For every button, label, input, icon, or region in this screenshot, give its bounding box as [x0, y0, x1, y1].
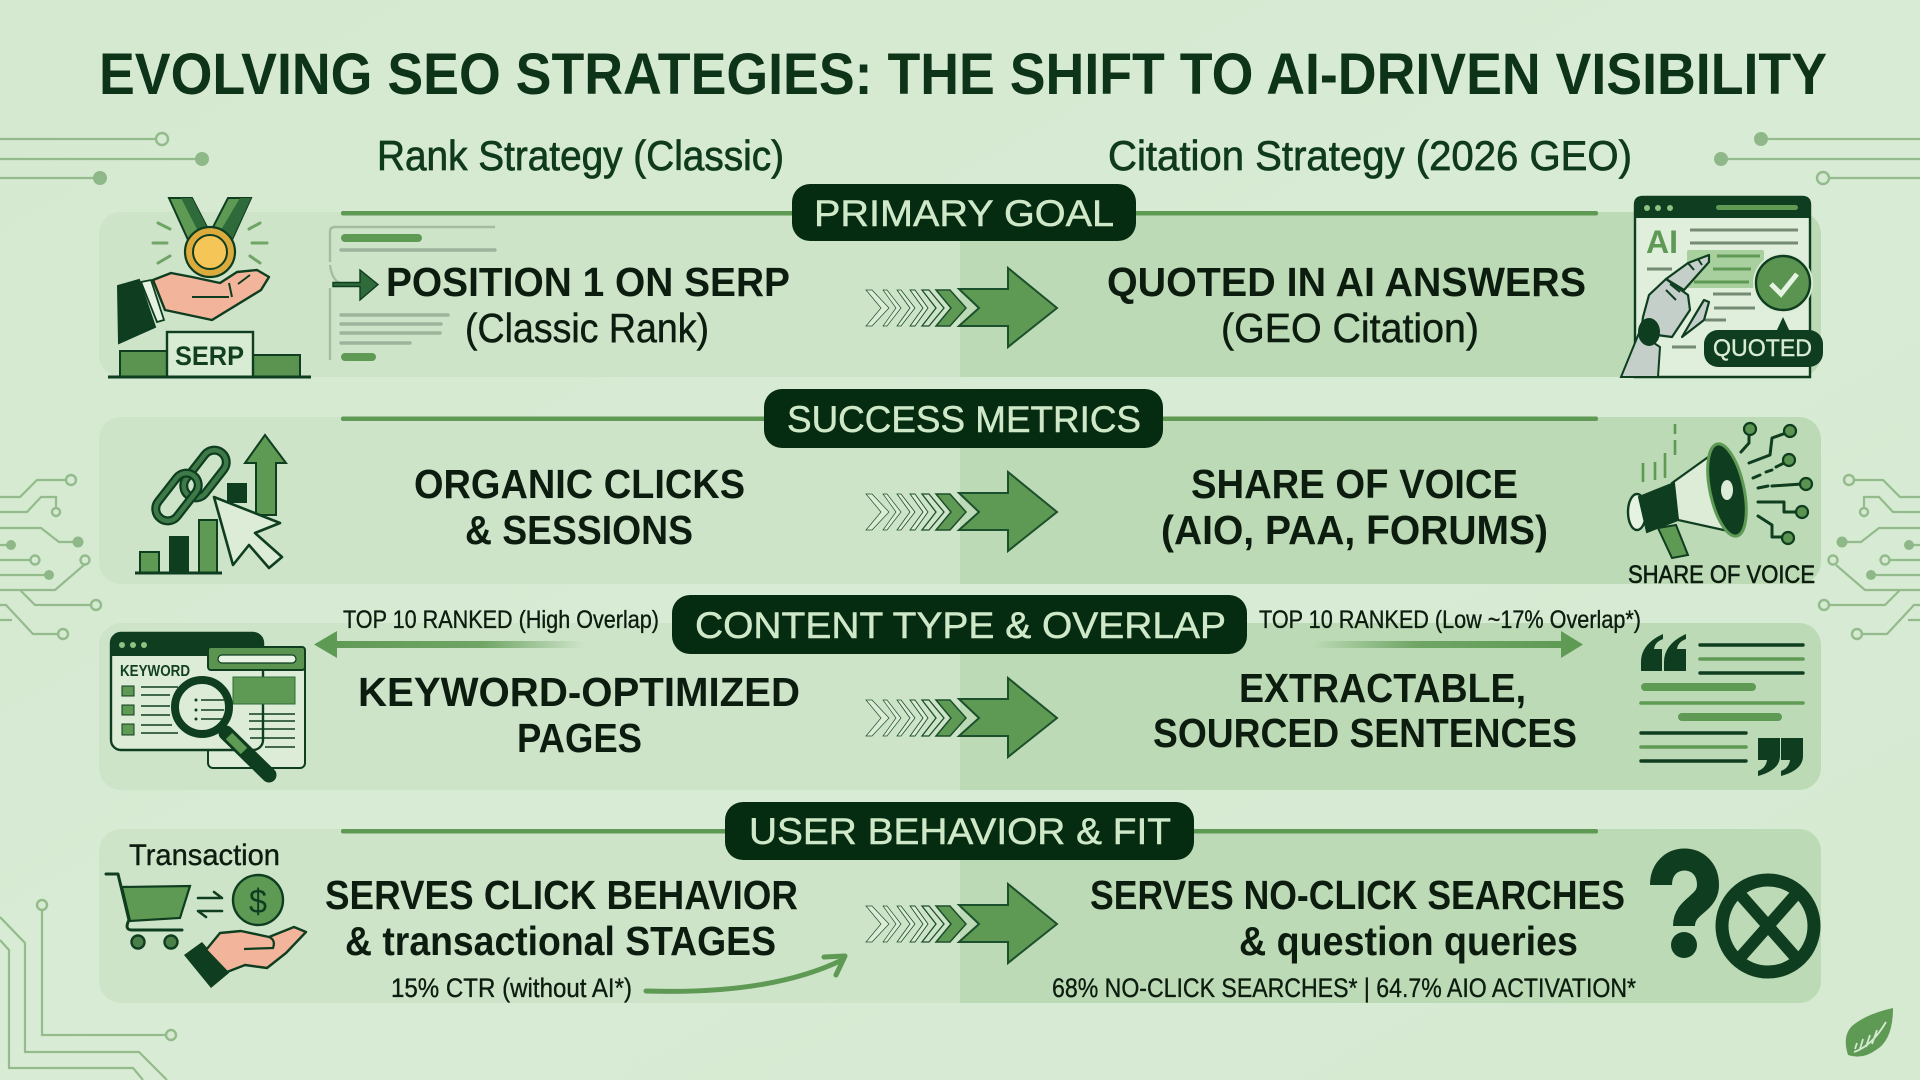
circuit decoration: bottom left	[0, 900, 176, 1080]
icon: robot hand citing AI answer, quoted: AI	[1646, 224, 1678, 260]
icon: keyword page under magnifier: KEYWORD	[120, 663, 190, 680]
arrow: low overlap, right	[1313, 631, 1583, 658]
text: classic rank: (Classic Rank)	[465, 305, 709, 351]
text: AIO, PAA, forums: (AIO, PAA, FORUMS)	[1161, 507, 1548, 553]
icon: quotation with sourced lines	[1641, 634, 1803, 776]
text: sourced sentences: SOURCED SENTENCES	[1153, 710, 1577, 756]
panel: success metrics	[99, 389, 1821, 589]
circuit decoration: middle left	[0, 475, 101, 639]
icon: link, growth bars, cursor	[135, 435, 286, 573]
circuit decoration: middle right	[1819, 475, 1920, 639]
panel: primary goal	[99, 184, 1823, 377]
text: serves click behavior: SERVES CLICK BEHAVIOR	[325, 872, 798, 918]
text: serves no-click searches: SERVES NO-CLICK SEARCHES	[1090, 872, 1625, 918]
text: 15% CTR: 15% CTR (without AI*)	[391, 973, 632, 1003]
circuit decoration: top left	[0, 133, 209, 185]
pill heading: content type and overlap: CONTENT TYPE & OVERLAP	[695, 605, 1226, 646]
icon: robot hand citing AI answer, quoted: QUOTED	[1713, 335, 1812, 362]
label: high overlap: TOP 10 RANKED (High Overlap)	[343, 606, 659, 634]
arrow: clicks to share of voice	[866, 472, 1057, 551]
pill heading: success metrics: SUCCESS METRICS	[787, 399, 1141, 440]
column heading: rank strategy: Rank Strategy (Classic)	[377, 132, 784, 179]
icon: medal in hand on SERP podium: SERP	[175, 341, 244, 371]
arrow: rank to citation	[866, 268, 1057, 347]
pill heading: user behavior and fit: USER BEHAVIOR & FIT	[749, 811, 1171, 852]
pill heading: primary goal: PRIMARY GOAL	[814, 193, 1114, 234]
pill heading: content type and overlap	[672, 595, 1247, 654]
text: share of voice: SHARE OF VOICE	[1191, 461, 1518, 507]
arrow: curved CTR	[646, 956, 845, 991]
icon: SERP results mock	[330, 227, 495, 361]
text: GEO citation: (GEO Citation)	[1221, 305, 1479, 351]
pill heading: primary goal	[792, 184, 1136, 241]
title: EVOLVING SEO STRATEGIES: THE SHIFT TO AI-DRIVEN VISIBILITY	[99, 42, 1827, 107]
text: quoted in AI answers: QUOTED IN AI ANSWERS	[1107, 259, 1586, 305]
arrow: position marker	[333, 270, 378, 300]
panel: content type and overlap	[99, 595, 1821, 790]
text: transactional stages: & transactional STAGES	[345, 918, 776, 964]
arrow: click to no-click	[866, 884, 1057, 963]
text: transaction label: Transaction	[129, 839, 280, 872]
circuit decoration: top right	[1714, 132, 1920, 184]
text: position 1 on SERP: POSITION 1 ON SERP	[386, 259, 790, 305]
text: and sessions: & SESSIONS	[465, 507, 693, 553]
text: question queries: & question queries	[1239, 918, 1578, 964]
text: keyword-optimized: KEYWORD-OPTIMIZED	[358, 669, 800, 715]
text: organic clicks: ORGANIC CLICKS	[414, 461, 745, 507]
arrow: keyword to sentences	[866, 678, 1057, 757]
icon: megaphone with network nodes	[1628, 423, 1812, 558]
icon: medal in hand on SERP podium	[108, 198, 311, 377]
icon: cart exchanged for money in hand	[106, 874, 306, 988]
text: no-click statistics: 68% NO-CLICK SEARCHES* | 64.7% AIO ACTIVATION*	[1052, 973, 1636, 1003]
text: pages: PAGES	[517, 715, 642, 761]
text: extractable: EXTRACTABLE,	[1239, 665, 1526, 711]
icon: leaf logo	[1846, 1008, 1893, 1057]
icon: keyword page under magnifier	[111, 633, 305, 775]
icon: cart exchanged for money in hand: $	[249, 883, 267, 921]
icon: robot hand citing AI answer, quoted	[1621, 197, 1823, 377]
icon: question mark and crossed circle	[1661, 860, 1814, 972]
column heading: citation strategy: Citation Strategy (2026 GEO)	[1108, 132, 1632, 179]
panel: user behavior and fit	[99, 802, 1821, 1003]
arrow: high overlap, left	[314, 631, 584, 658]
icon caption: share of voice: SHARE OF VOICE	[1628, 561, 1815, 589]
pill heading: user behavior and fit	[725, 802, 1194, 860]
pill heading: success metrics	[764, 389, 1163, 448]
label: low overlap: TOP 10 RANKED (Low ~17% Overlap*)	[1259, 606, 1641, 634]
